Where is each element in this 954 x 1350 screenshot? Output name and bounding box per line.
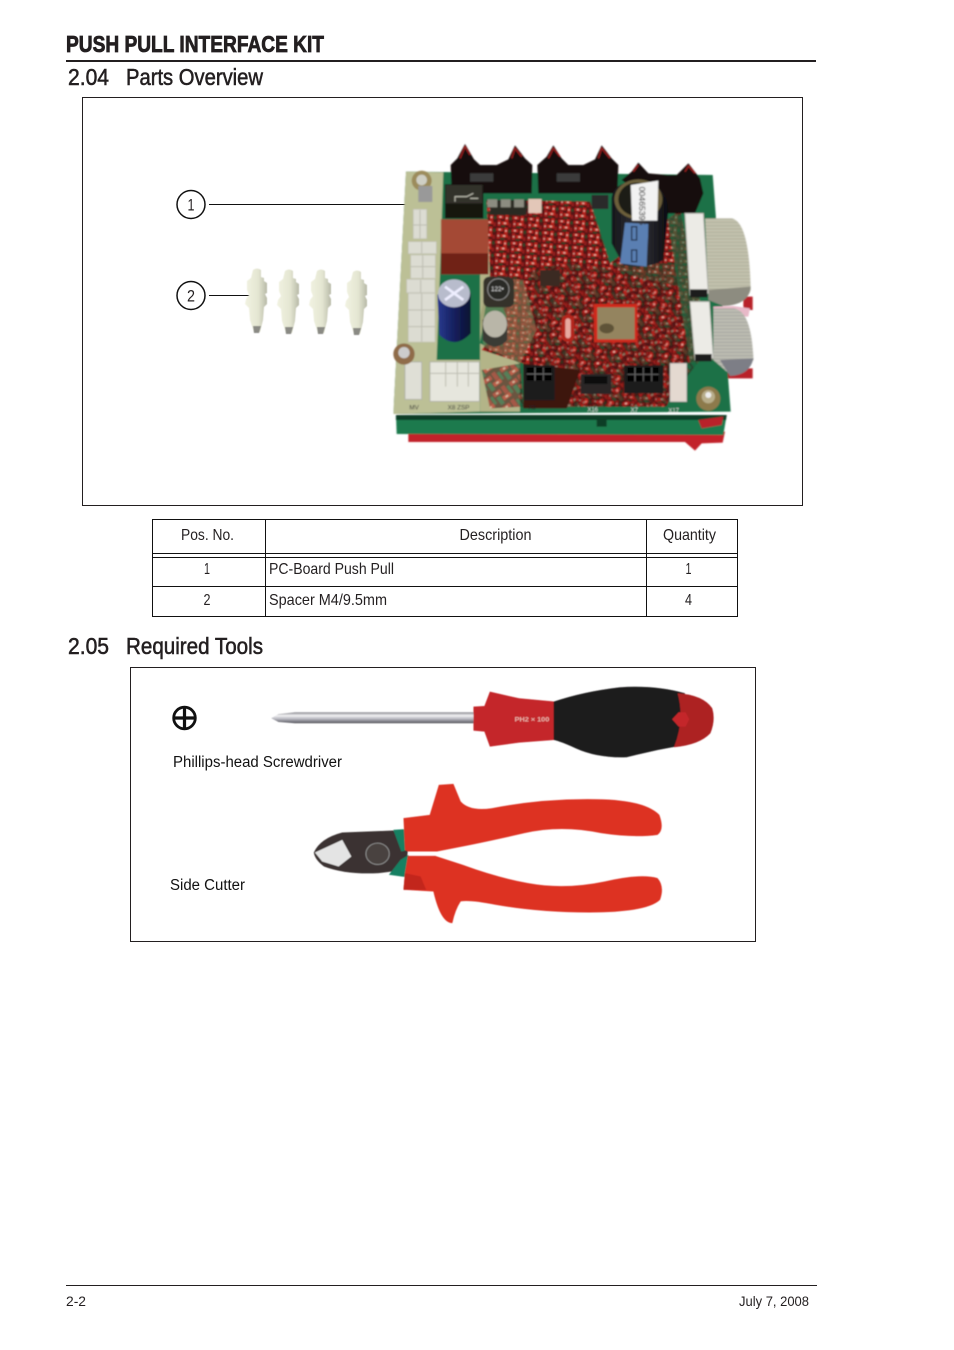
red end xyxy=(674,693,714,747)
table row 1: 1 xyxy=(204,561,210,578)
side cutter photo xyxy=(314,784,662,923)
board labels: X3 xyxy=(528,405,536,411)
lower green board xyxy=(396,415,727,435)
table row 2: 4 xyxy=(685,592,692,609)
blue capacitor xyxy=(437,279,471,342)
ribbon cables xyxy=(705,218,753,376)
document header title: PUSH PULL INTERFACE KIT xyxy=(66,31,324,57)
table row 1: PC-Board Push Pull xyxy=(269,561,394,578)
spacers xyxy=(245,268,367,335)
label: side cutter: Side Cutter xyxy=(170,877,245,894)
parts table xyxy=(152,519,738,617)
table row 2: Spacer M4/9.5mm xyxy=(269,592,387,609)
circuit texture xyxy=(482,200,713,407)
inductor and silver capacitor: 122• xyxy=(491,286,504,293)
inductor and silver capacitor xyxy=(483,277,514,347)
table row 1 xyxy=(204,561,692,578)
relay and brown block xyxy=(441,184,488,274)
panel: required tools xyxy=(130,668,756,942)
green insulation xyxy=(389,829,409,877)
lower red board xyxy=(408,432,725,451)
main board xyxy=(393,172,731,414)
board labels: X17 xyxy=(668,408,680,414)
hex badge xyxy=(672,712,689,727)
board labels: X7 xyxy=(631,408,639,414)
top connectors xyxy=(451,144,703,215)
red backing of cables xyxy=(727,297,753,378)
table header row: Description xyxy=(460,527,532,544)
heading: 2.04 Parts Overview: Parts Overview xyxy=(126,64,263,90)
PC board photo xyxy=(393,144,753,451)
heading: 2.05 Required Tools xyxy=(68,633,263,659)
CPU chip xyxy=(594,304,637,342)
callout 1: 1 xyxy=(188,196,194,214)
page number: 2-2 xyxy=(66,1293,86,1309)
table header row: Pos. No. xyxy=(181,527,234,544)
table header row xyxy=(181,527,716,544)
right white connectors xyxy=(685,213,713,361)
small chip xyxy=(540,270,560,286)
left white connectors xyxy=(407,209,436,342)
table row 2: 2 xyxy=(204,592,211,609)
screwdriver photo xyxy=(271,687,714,757)
table header row: Quantity xyxy=(663,527,716,544)
table row 2 xyxy=(204,592,692,609)
panel: parts overview xyxy=(82,98,802,506)
board labels: X16 xyxy=(587,407,599,413)
shaft xyxy=(271,712,475,723)
board labels: MV xyxy=(409,404,420,411)
board labels xyxy=(409,404,680,414)
black grip xyxy=(554,687,685,757)
label: phillips-head screwdriver: Phillips-head Screwdriver xyxy=(173,754,342,771)
heading: 2.05 Required Tools: Required Tools xyxy=(126,633,263,659)
heading: 2.05 Required Tools: 2.05 xyxy=(68,633,109,659)
callout 2 xyxy=(177,282,250,310)
crystal xyxy=(562,315,574,342)
bottom connectors xyxy=(405,362,687,402)
heading: 2.04 Parts Overview: 2.04 xyxy=(68,64,109,90)
big capacitor: 00465395 xyxy=(637,187,647,225)
board labels: X8 ZSP xyxy=(448,404,469,411)
callout 2: 2 xyxy=(187,286,195,306)
table row 1: 1 xyxy=(686,561,692,578)
lower handle xyxy=(403,856,662,923)
heading: 2.04 Parts Overview xyxy=(68,64,263,90)
icon: phillips head xyxy=(173,706,196,730)
footer date: July 7, 2008 xyxy=(739,1293,809,1309)
screwdriver photo: PH2 × 100 xyxy=(515,717,549,724)
red collar and grip xyxy=(473,692,555,747)
callout 1 xyxy=(177,190,408,218)
cutter jaw xyxy=(314,831,408,873)
upper handle xyxy=(403,784,662,851)
mounting screws xyxy=(393,171,720,411)
big capacitor xyxy=(612,179,668,267)
